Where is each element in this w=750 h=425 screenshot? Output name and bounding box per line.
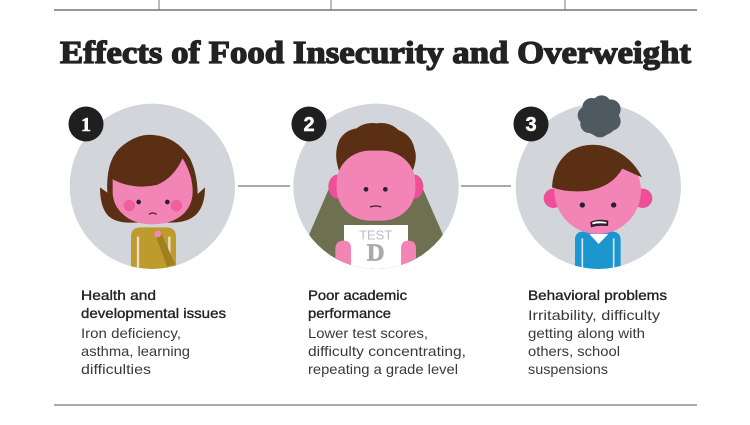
panel: health and developmental issues illustration <box>70 104 235 270</box>
background circle <box>516 104 681 269</box>
text block: poor academic performance: repeating a grade level <box>308 361 458 377</box>
badge 3: 3 <box>525 114 537 136</box>
text block: health and developmental issues: Iron deficiency, <box>81 325 181 341</box>
text block: poor academic performance <box>308 287 466 377</box>
cheeks <box>124 200 135 211</box>
brooch <box>154 231 161 237</box>
test label: TEST <box>359 227 392 242</box>
shirt <box>575 232 621 270</box>
mouth <box>590 220 608 227</box>
badge 2: 2 <box>303 114 315 136</box>
girl hair <box>100 135 205 223</box>
hair <box>552 145 642 191</box>
background circle <box>70 104 235 269</box>
boy jacket <box>309 190 443 269</box>
boy hair <box>336 123 416 173</box>
text block: behavioral problems: others, school <box>528 343 620 359</box>
grade: D <box>367 240 385 267</box>
dark cloud <box>578 95 621 137</box>
text block: health and developmental issues <box>81 287 226 377</box>
badge 1 <box>68 106 104 142</box>
ears <box>328 175 346 199</box>
text block: health and developmental issues: developmental issues <box>81 305 226 321</box>
panel: poor academic performance illustration <box>293 104 459 277</box>
face <box>554 147 641 234</box>
eyes <box>364 187 368 192</box>
girl body <box>131 227 176 270</box>
text block: poor academic performance: Poor academic <box>308 287 407 303</box>
text block: health and developmental issues: difficulties <box>81 361 151 377</box>
text block: behavioral problems: suspensions <box>528 361 608 377</box>
text block: behavioral problems <box>528 287 667 377</box>
eyes <box>580 202 585 208</box>
badge 3 <box>514 106 548 142</box>
text block: health and developmental issues: Health and <box>81 287 156 303</box>
test paper <box>344 225 408 272</box>
connector line 1 <box>238 185 290 187</box>
girl face <box>113 158 193 224</box>
text block: poor academic performance: performance <box>308 305 391 321</box>
ears <box>544 189 563 208</box>
text block: behavioral problems: getting along with <box>528 325 645 341</box>
text block: poor academic performance: Lower test scores, <box>308 325 428 341</box>
text block: health and developmental issues: asthma, learning <box>81 343 190 359</box>
text block: behavioral problems: Behavioral problems <box>528 287 667 303</box>
mouth <box>149 213 157 214</box>
text block: poor academic performance: difficulty concentrating, <box>308 343 466 359</box>
top table rule <box>54 0 697 10</box>
hands <box>335 240 416 266</box>
badge 1: 1 <box>81 114 91 136</box>
badge 2 <box>292 106 326 142</box>
title: Effects of Food Insecurity and Overweight <box>60 34 691 70</box>
boy face <box>337 151 415 221</box>
bottom rule <box>54 404 697 406</box>
eyes <box>136 200 141 204</box>
panel: behavioral problems illustration <box>516 95 681 270</box>
connector line 2 <box>461 185 511 187</box>
mouth <box>370 204 381 209</box>
text block: behavioral problems: Irritability, difficulty <box>528 307 660 323</box>
background circle <box>293 104 459 269</box>
